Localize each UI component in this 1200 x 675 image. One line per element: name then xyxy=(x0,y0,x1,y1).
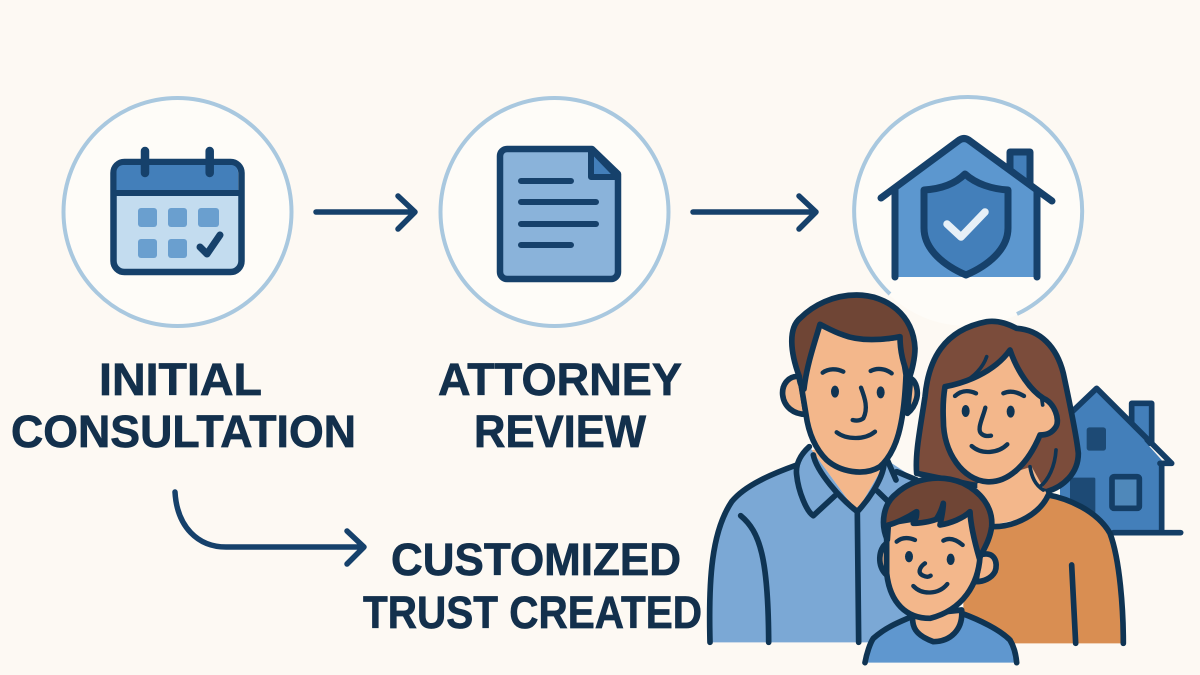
label: attorney review: ATTORNEY xyxy=(438,354,682,405)
label: customized trust created: CUSTOMIZED xyxy=(391,534,681,585)
curved arrow to customized trust xyxy=(175,492,364,564)
label: initial consultation: CONSULTATION xyxy=(11,406,356,457)
label: attorney review: REVIEW xyxy=(474,406,646,457)
arrow: review to trust xyxy=(693,196,816,229)
illustration: family with house xyxy=(710,295,1181,663)
step 1: calendar in circle xyxy=(64,98,292,326)
person: mother xyxy=(916,321,1123,643)
label: attorney review xyxy=(438,354,682,457)
person: child xyxy=(865,478,1017,663)
step 3: protected house in circle xyxy=(854,97,1082,326)
label: customized trust created xyxy=(363,534,702,638)
icon: document xyxy=(500,149,618,279)
step 2: document in circle xyxy=(440,98,668,326)
arrow: consultation to review xyxy=(316,196,415,229)
icon: calendar xyxy=(114,151,242,272)
person: father xyxy=(710,295,940,642)
label: initial consultation xyxy=(11,354,356,457)
icon: house with shield xyxy=(881,138,1052,277)
label: customized trust created: TRUST CREATED xyxy=(363,587,702,638)
label: initial consultation: INITIAL xyxy=(99,354,262,405)
small house behind family xyxy=(1060,388,1181,533)
